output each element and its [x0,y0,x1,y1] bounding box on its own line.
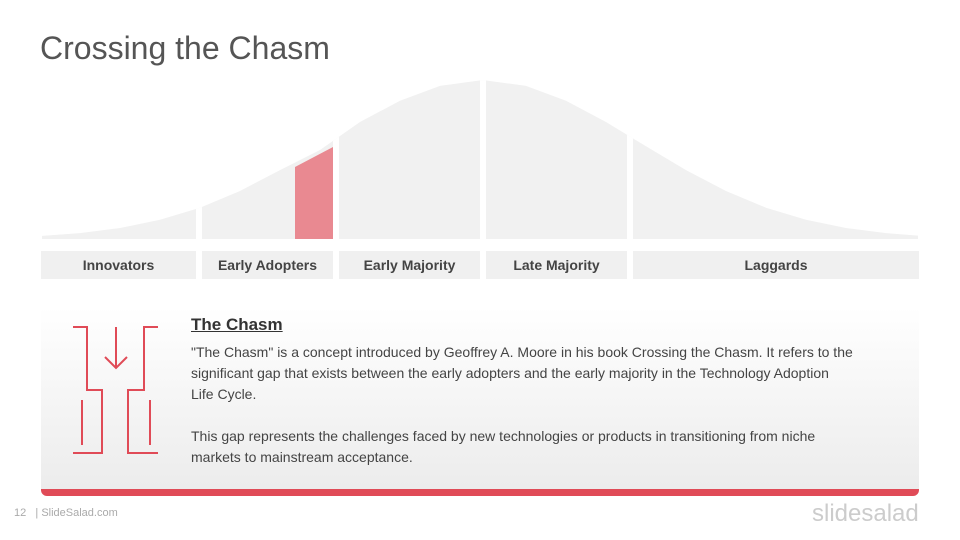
label: early majority [339,251,480,279]
footer: 12 | SlideSalad.com [14,507,118,519]
chart: bell curve [42,80,918,239]
title: Crossing the Chasm [40,30,330,66]
label: laggards [633,251,919,279]
panel: the chasm [41,307,919,496]
highlight: chasm segment [295,147,333,239]
logo: slidesalad [812,500,919,527]
body text: markets to mainstream acceptance. [191,449,413,465]
label: late majority: Late Majority [513,257,600,273]
label: laggards: Laggards [744,257,808,273]
body text: This gap represents the challenges faced by new technologies or products in transitioning from niche [191,428,815,444]
label: innovators [41,251,196,279]
body text: significant gap that exists between the early adopters and the early majority in the Technology Adoption [191,365,829,381]
heading: The Chasm [191,315,283,334]
label: early adopters: Early Adopters [218,257,317,273]
icon: chasm [73,326,158,454]
body text: "The Chasm" is a concept introduced by Geoffrey A. Moore in his book Crossing the Chasm. It refers to the [191,344,853,360]
labels row [41,251,919,279]
label: early majority: Early Majority [364,257,455,273]
label: late majority [486,251,627,279]
body text [191,344,853,465]
label: early adopters [202,251,333,279]
body text: Life Cycle. [191,386,256,402]
label: innovators: Innovators [83,257,154,273]
